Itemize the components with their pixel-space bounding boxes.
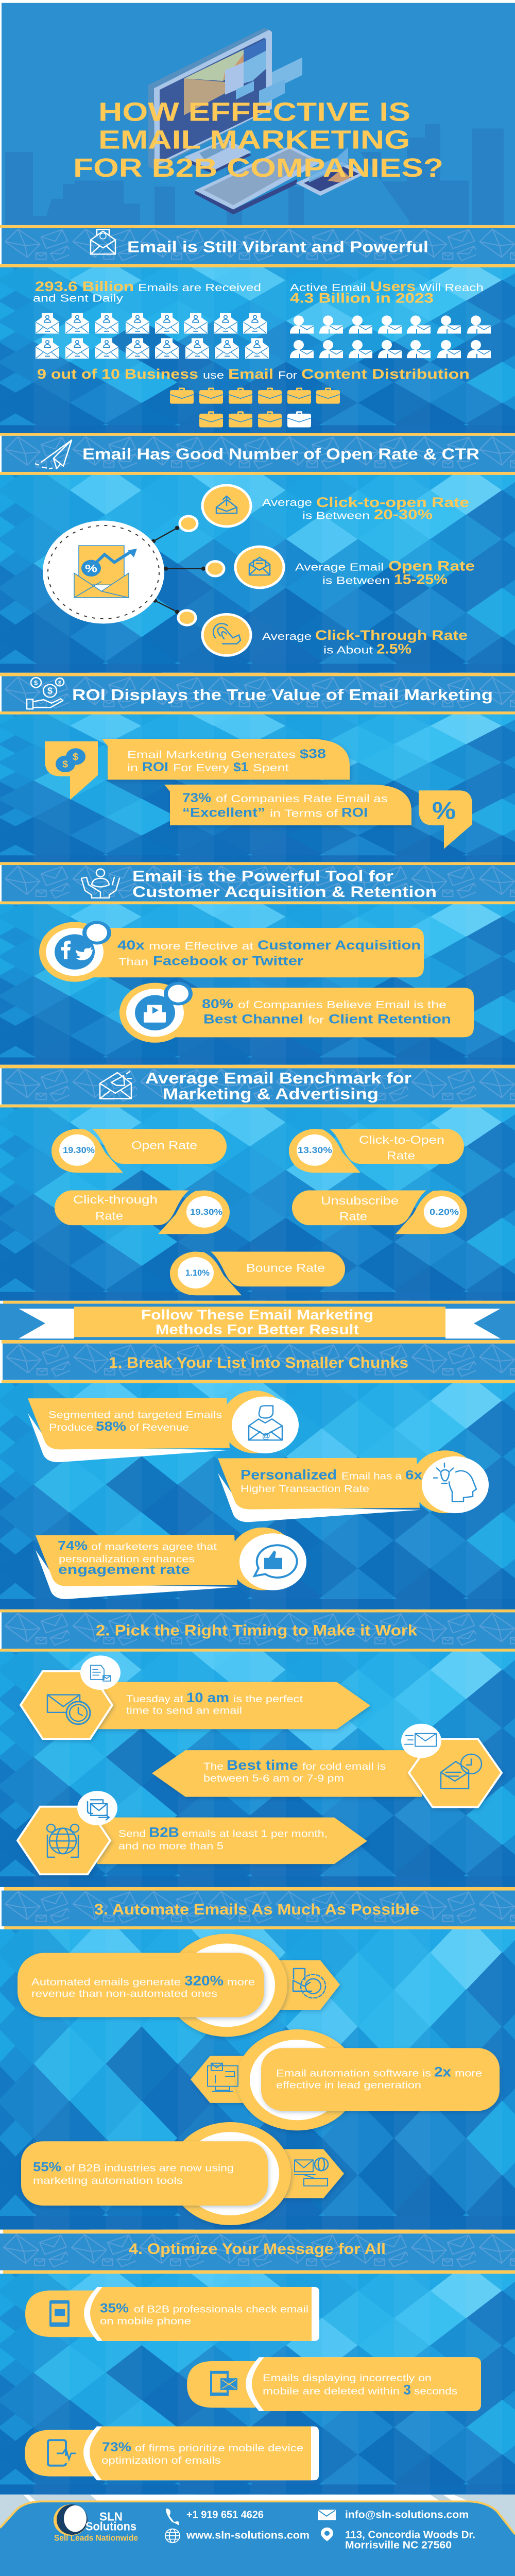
stat: 9 out of 10 businesses: use [203, 370, 224, 381]
stat: click-to-open rate: Average [262, 497, 312, 509]
card: 73% optimize: 73% [102, 2441, 131, 2454]
card: client retention: Client Retention [329, 1012, 451, 1027]
card: 35% mobile: of B2B professionals check email [134, 2304, 308, 2315]
central circle with growth envelope [43, 520, 164, 623]
stat: 4.3 billion users: Active Email [290, 282, 366, 294]
callout: 73% excellent: ROI [341, 806, 368, 820]
stat: 293.6 billion emails: 293.6 Billion [35, 278, 134, 294]
card: segmented emails: 58% [96, 1420, 126, 1434]
callout: 73% excellent: “Excellent” [182, 806, 265, 820]
icon: phone with envelope [210, 2371, 237, 2396]
panel: hero [2, 3, 515, 225]
stat: open rate: Average Email [295, 562, 384, 573]
panel: step 1 break your list [0, 1345, 515, 1625]
logo [54, 2504, 138, 2543]
heading [81, 868, 437, 901]
card: 73% optimize [25, 2427, 319, 2480]
card: deleted within 3 seconds [187, 2357, 481, 2411]
tag: unsubscribe rate: Unsubscribe [321, 1195, 399, 1207]
stat: click-through rate: Click-Through Rate [315, 628, 468, 643]
arrow: best time: The [203, 1761, 224, 1772]
stat: 9 out of 10 businesses: For [278, 370, 297, 381]
callout: 73% excellent: in Terms of [270, 808, 338, 820]
ribbon heading: follow these methods: Methods For Better Result [156, 1321, 359, 1337]
panel: benchmarks [0, 1070, 515, 1314]
arrow: b2b frequency: and no more than 5 [118, 1841, 224, 1852]
card: 55% marketing automation: 55% [33, 2160, 61, 2174]
city skyline [5, 124, 504, 225]
heading: 2. Pick the Right Timing to Make it Work [96, 1622, 417, 1639]
icon grid: users [290, 315, 491, 358]
card: 320% revenue: revenue than non-automated ones [31, 1989, 217, 1999]
callout: $38 ROI: ROI [142, 760, 168, 774]
card: 55% marketing automation [21, 2122, 344, 2225]
footer [0, 2495, 515, 2576]
icon: mail stack [88, 1800, 109, 1820]
card: 2x lead generation: more [455, 2068, 482, 2079]
arrow: tuesday 10 am [21, 1655, 370, 1739]
callout: $38 ROI: $ [73, 752, 78, 762]
arrow: b2b frequency: emails at least 1 per month, [182, 1828, 328, 1840]
tag: unsubscribe rate: Rate [339, 1210, 367, 1223]
callout: $38 ROI: $1 [233, 760, 248, 774]
card: customer acquisition: Than [118, 956, 148, 968]
arrow: best time: Best time [227, 1757, 298, 1773]
icon: letter with clock [441, 1761, 469, 1788]
stat: open rate: 15-25% [394, 571, 448, 587]
stat: 9 out of 10 businesses: Content Distribution [301, 366, 470, 382]
stat: 4.3 billion users: Will Reach [419, 282, 484, 294]
card: 320% revenue: Automated emails generate [31, 1977, 181, 1988]
arrow: tuesday 10 am: Tuesday at [126, 1693, 184, 1705]
connector lines [152, 527, 205, 613]
card: 35% mobile: 35% [100, 2301, 129, 2315]
heading: $ [58, 680, 61, 686]
icon: phone with pulse [48, 2440, 66, 2466]
card: 2x lead generation: Email automation software is [276, 2068, 431, 2079]
contact: address: 113, Concordia Woods Dr. [345, 2529, 475, 2541]
icon: lightbulb head [434, 1463, 476, 1501]
card: engagement rate: 74% [58, 1539, 88, 1553]
tag: click-through rate: Rate [95, 1210, 123, 1222]
tag: click-through rate [55, 1190, 230, 1234]
callout: 73% excellent: of Companies Rate Email as [216, 793, 388, 805]
contact: address: Morrisville NC 27560 [345, 2539, 452, 2551]
icon: thumbs up bubble [254, 1545, 297, 1578]
callout: $38 ROI: $38 [300, 747, 326, 761]
heading: 1. Break Your List Into Smaller Chunks [109, 1355, 408, 1371]
card: customer acquisition: Facebook or Twitter [153, 954, 303, 968]
tag: bounce rate: Bounce Rate [246, 1262, 325, 1274]
callout: 73% excellent: % [432, 798, 456, 824]
stat: click-to-open rate: is Between [302, 510, 370, 521]
callout: 73% excellent [164, 785, 472, 849]
card: 2x lead generation [191, 2029, 500, 2130]
ribbon heading: follow these methods: Follow These Email Marketing [141, 1307, 373, 1323]
icon grid: envelopes [36, 313, 269, 359]
card: personalized email: Higher Transaction Rate [241, 1484, 369, 1495]
icon: computer with mail [208, 2063, 238, 2091]
card: engagement rate: of marketers agree that [91, 1541, 217, 1552]
stat: 9 out of 10 businesses: 9 out of 10 Business [37, 366, 198, 382]
heading: Email Has Good Number of Open Rate & CTR [82, 445, 479, 463]
card: 73% optimize: optimization of emails [101, 2455, 221, 2466]
stat: click-to-open rate: Click-to-open Rate [316, 494, 469, 510]
card: client retention: 80% [202, 997, 233, 1011]
contact: phone [166, 2509, 264, 2526]
arrow: tuesday 10 am: time to send an email [126, 1705, 242, 1717]
card: segmented emails: Segmented and targeted Emails [48, 1410, 222, 1420]
card: 55% marketing automation: marketing automation tools [33, 2175, 183, 2187]
arrow: best time: for cold email is [302, 1761, 386, 1772]
card: 320% revenue: 320% [184, 1973, 224, 1988]
card: deleted within 3 seconds: seconds [414, 2386, 457, 2397]
card: customer acquisition: more Effective at [149, 940, 253, 952]
card: segmented emails: of Revenue [129, 1422, 189, 1433]
callout: $38 ROI: $ [62, 759, 68, 770]
ribbon heading: follow these methods [0, 1301, 515, 1340]
callout: $38 ROI: Email Marketing Generates [127, 749, 296, 760]
arrow: best time [152, 1724, 502, 1807]
icon: person in envelope [249, 1406, 282, 1440]
card: segmented emails: @ [262, 1432, 270, 1440]
stat: open rate [235, 547, 475, 588]
card: client retention: Best Channel [203, 1012, 303, 1027]
tag: click-through rate: Click-through [73, 1194, 158, 1206]
card: engagement rate: engagement rate [58, 1563, 190, 1577]
contact: email: info@sln-solutions.com [345, 2509, 469, 2520]
callout: $38 ROI: For Every [173, 762, 230, 774]
card: customer acquisition: 40x [117, 938, 145, 953]
card: 320% revenue: more [227, 1977, 255, 1988]
panel: step 2 timing [0, 1611, 515, 1904]
icon: facebook and twitter [61, 941, 93, 960]
callout: 73% excellent: 73% [182, 791, 211, 805]
stat: 9 out of 10 businesses: Email [228, 366, 273, 382]
heading: Email is the Powerful Tool for [132, 868, 393, 885]
stat: 4.3 billion users: 4.3 Billion in 2023 [290, 290, 434, 306]
tag: unsubscribe rate: 0.20% [430, 1207, 459, 1217]
stat: 9 out of 10 businesses [37, 366, 470, 382]
card: deleted within 3 seconds: Emails displaying incorrectly on [263, 2372, 432, 2384]
stat: click-to-open rate: 20-30% [374, 506, 433, 522]
title: HOW EFFECTIVE IS [98, 97, 410, 127]
card: personalized email: Personalized [241, 1467, 337, 1482]
card: 320% revenue [18, 1934, 340, 2037]
tag: click-to-open rate: Click-to-Open [359, 1133, 444, 1146]
stat: 4.3 billion users: Users [370, 278, 416, 294]
stat: click-through rate: is About [323, 645, 373, 656]
card: client retention: for [308, 1014, 324, 1026]
card: 55% marketing automation: of B2B industries are now using [65, 2163, 234, 2174]
card: 2x lead generation: effective in lead generation [276, 2080, 421, 2091]
panel: step 4 optimize [0, 2236, 515, 2510]
panel: email is still vibrant [0, 230, 515, 444]
heading: Email is Still Vibrant and Powerful [127, 238, 428, 256]
card: segmented emails: Produce [49, 1422, 93, 1433]
title: EMAIL MARKETING [98, 125, 410, 155]
stat: 293.6 billion emails: Emails are Received [138, 282, 261, 294]
panel: acquisition and retention [0, 868, 515, 1076]
title: FOR B2B COMPANIES? [73, 153, 443, 183]
icon: document to mail [91, 1665, 111, 1681]
logo: Sell Leads Nationwide [54, 2533, 138, 2543]
callout: $38 ROI [45, 739, 350, 800]
tag: click-to-open rate [289, 1129, 464, 1173]
arrow: b2b frequency [18, 1791, 367, 1874]
panel: step 3 automate [0, 1878, 515, 2250]
arrow: tuesday 10 am: 10 am [186, 1689, 229, 1705]
logo: Solutions [85, 2520, 136, 2533]
icon grid: briefcases [170, 387, 340, 428]
arrow: best time: between 5-6 am or 7-9 pm [203, 1773, 344, 1784]
logo: SLN [99, 2510, 123, 2523]
heading: 4. Optimize Your Message for All [129, 2241, 386, 2258]
card: personalized email: Email has a [341, 1471, 402, 1482]
stat: click-to-open rate [202, 485, 469, 527]
card: customer acquisition [39, 921, 424, 982]
stat: 293.6 billion emails [33, 278, 261, 304]
stat: 293.6 billion emails: and Sent Daily [33, 293, 124, 304]
icon: phone with mail [49, 2300, 70, 2327]
heading [100, 1070, 411, 1103]
heading: $ [47, 686, 53, 696]
callout: $38 ROI: in [127, 762, 138, 774]
heading [27, 677, 493, 709]
stat: 4.3 billion users [290, 278, 484, 306]
card: engagement rate: personalization enhances [59, 1554, 195, 1565]
card: deleted within 3 seconds: 3 [403, 2382, 411, 2397]
arrow: b2b frequency: B2B [149, 1824, 179, 1840]
heading: Customer Acquisition & Retention [132, 884, 437, 901]
card: 35% mobile: on mobile phone [100, 2316, 191, 2327]
card: engagement rate [36, 1528, 306, 1599]
panel: ROI [0, 677, 515, 872]
card: 2x lead generation: 2x [434, 2064, 451, 2079]
icon: people and globe [49, 1828, 76, 1854]
tag: bounce rate: 1.10% [185, 1268, 210, 1278]
card: personalized email: 6x [405, 1468, 422, 1482]
heading: $ [34, 680, 38, 686]
central circle with growth envelope: % [85, 563, 97, 574]
heading: 3. Automate Emails As Much As Possible [94, 1902, 419, 1918]
tag: click-through rate: 19.30% [190, 1207, 222, 1217]
contact: phone: +1 919 651 4626 [186, 2509, 264, 2520]
icon: automation gear [293, 1969, 312, 1991]
panel: open rate and CTR [0, 440, 515, 686]
card: personalized email [218, 1450, 489, 1522]
tag: open rate [52, 1129, 227, 1173]
stat: open rate: Open Rate [388, 558, 475, 573]
heading: Marketing & Advertising [163, 1085, 379, 1103]
title [73, 97, 443, 183]
stat: click-through rate: 2.5% [376, 641, 411, 656]
tag: click-to-open rate: Rate [387, 1149, 415, 1162]
heading: ROI Displays the True Value of Email Marketing [72, 686, 493, 704]
tag: click-to-open rate: 13.30% [298, 1145, 332, 1155]
card: deleted within 3 seconds: mobile are deleted within [263, 2386, 400, 2397]
icon: fast mail [405, 1734, 436, 1747]
card: client retention: of Companies Believe Email is the [238, 999, 447, 1011]
card: 73% optimize: of firms prioritize mobile device [135, 2443, 303, 2454]
section divider bands [0, 225, 515, 2274]
heading: Average Email Benchmark for [145, 1070, 411, 1087]
stat: open rate: is Between [322, 575, 390, 586]
icon: video mail [144, 1005, 166, 1023]
card: 35% mobile [25, 2287, 319, 2341]
illustration: computer with envelopes [148, 28, 366, 214]
arrow: b2b frequency: Send [118, 1828, 146, 1840]
heading [35, 440, 479, 469]
tag: bounce rate [170, 1252, 345, 1295]
heading [91, 230, 428, 256]
arrow: tuesday 10 am: is the perfect [233, 1693, 303, 1705]
tag: open rate: Open Rate [131, 1139, 197, 1151]
contact: address [321, 2528, 475, 2551]
icon: mail globe keyboard [295, 2160, 328, 2186]
tag: unsubscribe rate [292, 1190, 467, 1234]
small connector dots [178, 516, 224, 625]
callout: $38 ROI: Spent [253, 762, 289, 774]
contact: website: www.sln-solutions.com [186, 2530, 310, 2541]
card: customer acquisition: Customer Acquisition [258, 938, 421, 953]
stat: click-through rate: Average [262, 631, 312, 642]
tag: open rate: 19.30% [63, 1145, 95, 1155]
card: client retention [119, 982, 474, 1043]
card: segmented emails [28, 1391, 299, 1462]
stat: click-through rate [202, 614, 468, 656]
icon: mail with clock [47, 1695, 80, 1713]
